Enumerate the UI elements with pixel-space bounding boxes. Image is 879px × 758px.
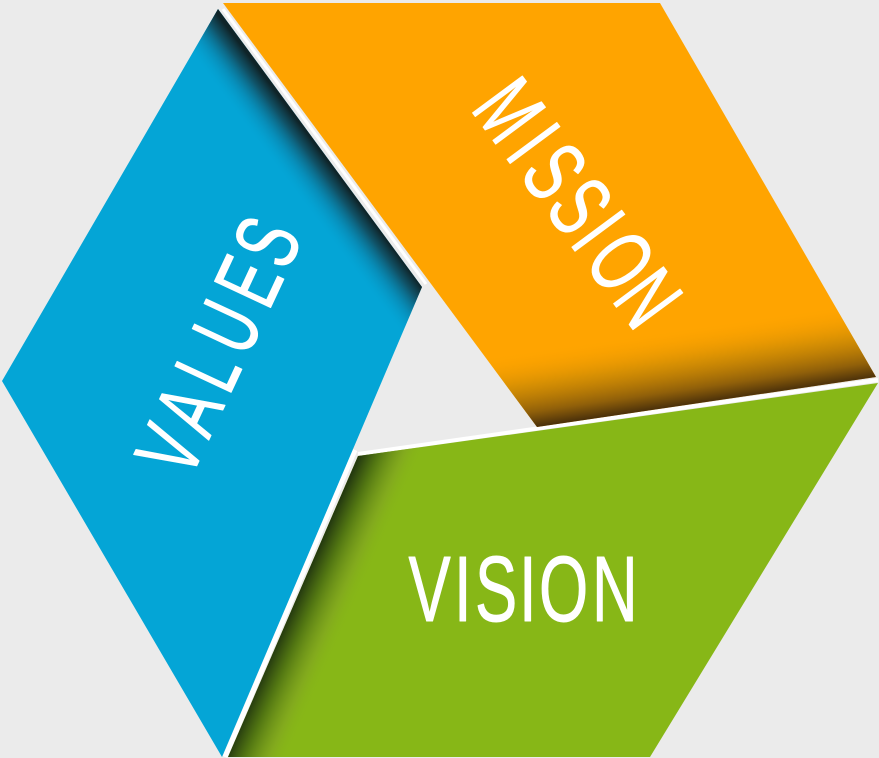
label: mission: MISSION [453, 61, 701, 346]
label: vision: VISION [408, 537, 638, 641]
label: values: VALUES [117, 203, 322, 490]
white gap lines [223, 9, 878, 757]
